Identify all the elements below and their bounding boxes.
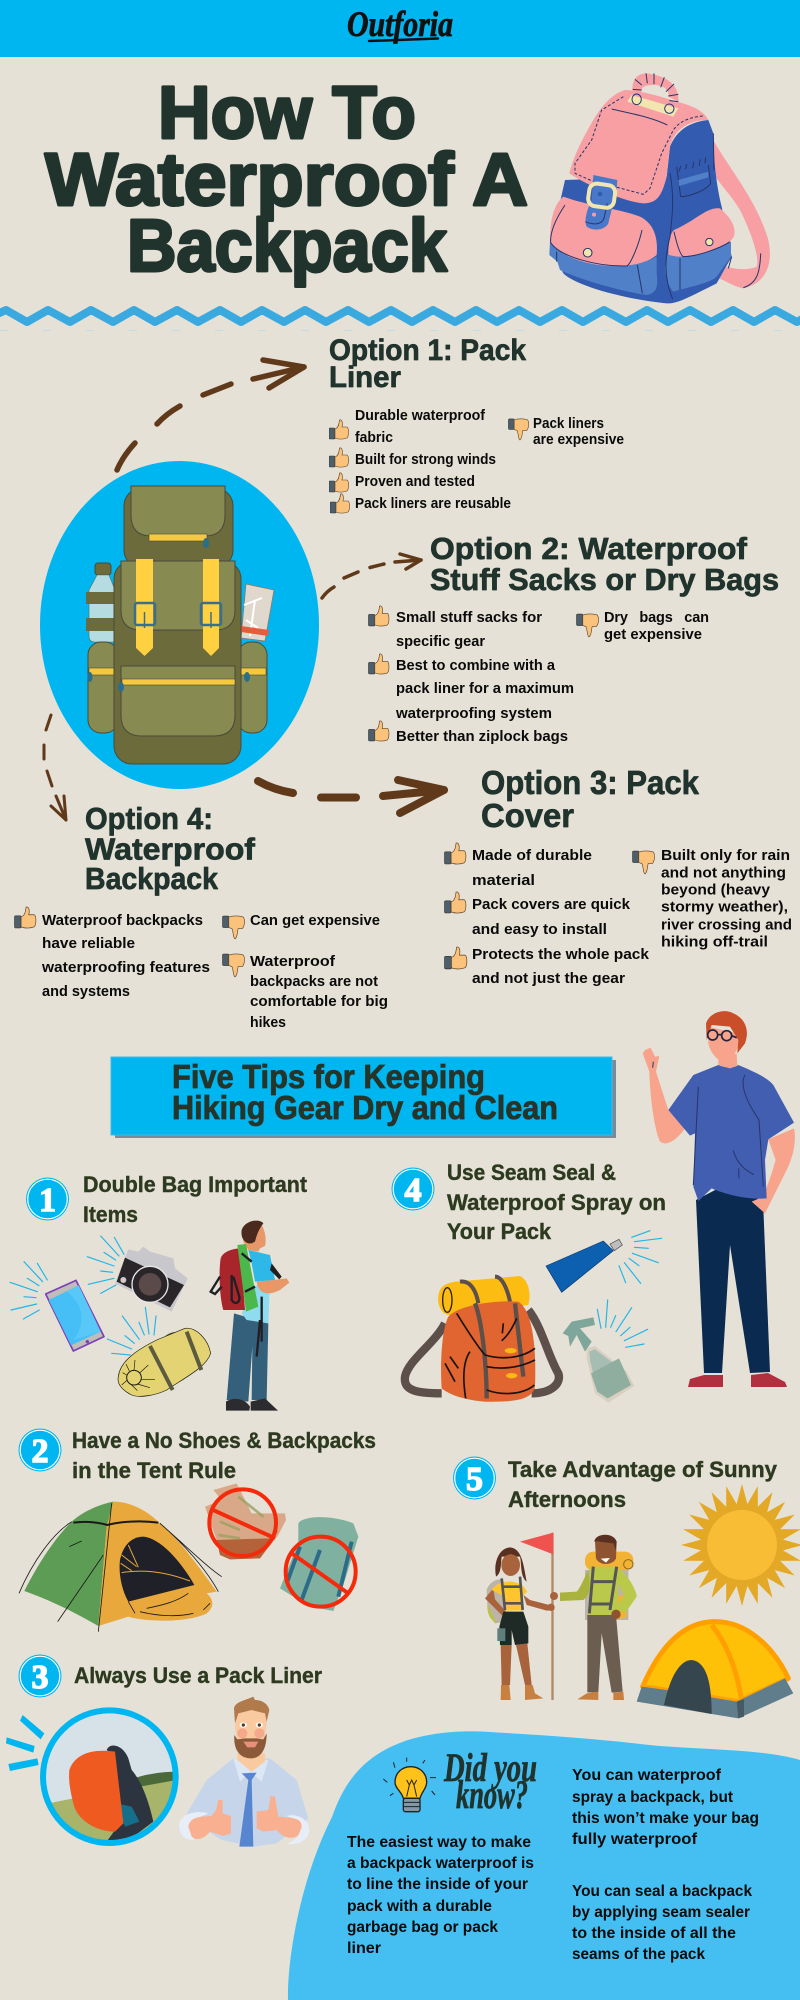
number badge 5: 5 — [466, 1461, 483, 1498]
heading: option 4: Waterproof — [85, 832, 256, 866]
icons: thumbs down — [223, 916, 245, 977]
top compartment — [124, 488, 233, 568]
number badge 2 — [18, 1428, 62, 1472]
panel: option 4 waterproof backpack — [15, 801, 388, 1031]
tip 4: seam seal and waterproof spray — [392, 1160, 666, 1403]
woman hiker — [485, 1547, 554, 1700]
cons list: beyond (heavy — [661, 882, 770, 898]
pros list — [41, 913, 210, 1000]
heading: option 2: Stuff Sacks or Dry Bags — [430, 562, 779, 597]
did you know title: know? — [456, 1772, 528, 1817]
rays — [10, 1236, 156, 1355]
icon: phone — [46, 1280, 104, 1351]
panel: option 2 stuff sacks or dry bags — [369, 531, 779, 745]
tip 1 heading: Double Bag Important — [83, 1172, 308, 1197]
cons list: Waterproof — [250, 954, 335, 970]
icon: sleeping bag — [118, 1328, 211, 1396]
pack, tube and spray illustration — [405, 1231, 662, 1403]
logo: Outforia: Outforia — [347, 4, 453, 44]
icon: thumbs down — [577, 614, 599, 637]
cons list: hikes — [250, 1015, 286, 1031]
number badge 3: 3 — [32, 1659, 48, 1696]
panel: option 1 pack liner — [329, 334, 624, 513]
pros list: material — [472, 873, 535, 889]
icons: thumbs up — [329, 420, 350, 513]
fact: easiest way: The easiest way to make — [347, 1834, 531, 1851]
pros list — [355, 408, 511, 512]
banner: five tips — [111, 1057, 616, 1138]
number badge 1: 1 — [39, 1182, 56, 1219]
icon: camera — [115, 1247, 188, 1312]
heading: option 2 — [430, 531, 779, 597]
cons list: river crossing and — [661, 918, 792, 934]
number badge 4 — [392, 1168, 434, 1210]
illustration: two hikers with flag — [485, 1533, 793, 1718]
tent, boot and backpack illustration — [19, 1483, 358, 1632]
man giving thumbs up — [179, 1697, 309, 1847]
tip 4 heading — [447, 1160, 666, 1244]
heading: option 4: Backpack — [85, 861, 219, 896]
tip 5 heading: Afternoons — [508, 1487, 626, 1512]
illustration: hiker from behind — [211, 1221, 289, 1411]
fact: seam sealer: to the inside of all the — [572, 1925, 736, 1942]
fact: easiest way: pack with a durable — [347, 1898, 492, 1915]
tip 3: always use a pack liner — [6, 1654, 322, 1847]
cons list: backpacks are not — [250, 974, 378, 990]
tip 2 heading — [72, 1428, 376, 1483]
pros list: Waterproof backpacks — [42, 913, 203, 929]
tip 5 heading — [508, 1457, 778, 1512]
pros list: Small stuff sacks for — [396, 610, 542, 626]
number badge 2: 2 — [32, 1433, 48, 1470]
number badge 5 — [453, 1456, 496, 1500]
pros list: Best to combine with a — [396, 658, 556, 674]
pros list: have reliable — [42, 936, 135, 952]
number badge 3 — [18, 1654, 62, 1698]
pros list: fabric — [355, 430, 393, 446]
arrow to option 2 — [322, 554, 421, 598]
number badge 4: 4 — [404, 1172, 422, 1209]
main body — [114, 561, 241, 764]
cons list: get expensive — [604, 627, 702, 643]
fact: waterproof spray: You can waterproof — [572, 1767, 722, 1784]
illustration: pink and blue backpack — [549, 73, 770, 303]
pros list: Pack liners are reusable — [355, 496, 511, 512]
man hiker — [547, 1535, 637, 1700]
wavy divider — [0, 310, 800, 330]
title: Backpack — [127, 204, 448, 287]
icon: light bulb — [383, 1758, 436, 1812]
tip 4 heading: Use Seam Seal & — [447, 1160, 616, 1185]
accent rays — [6, 1715, 44, 1771]
pros list: Protects the whole pack — [472, 947, 650, 963]
fact: waterproof spray: fully waterproof — [572, 1831, 698, 1848]
zipper pulls — [88, 538, 250, 692]
pros list — [395, 610, 574, 745]
fact: easiest way: to line the inside of your — [347, 1876, 528, 1893]
tip 1: double bag important items — [10, 1172, 308, 1411]
tip 1 heading — [83, 1172, 308, 1227]
pros list: Built for strong winds — [355, 452, 496, 468]
heading: option 1 — [329, 334, 526, 394]
icon: thumbs down — [633, 851, 655, 874]
cons list: are expensive — [533, 432, 624, 448]
banner heading: Five Tips for Keeping — [172, 1058, 485, 1095]
photo and man illustration — [6, 1697, 309, 1847]
did you know title — [443, 1745, 537, 1817]
arrow to option 3 — [258, 780, 444, 813]
tip 5 heading: Take Advantage of Sunny — [508, 1457, 778, 1482]
pros list: and easy to install — [472, 922, 607, 938]
heading: option 3: Option 3: Pack — [481, 764, 700, 801]
fact: waterproof spray: spray a backpack, but — [572, 1789, 734, 1806]
photo: hiker with orange pack cover — [40, 1707, 180, 1847]
fact: seam sealer — [572, 1883, 752, 1963]
fact: waterproof spray — [572, 1767, 759, 1848]
fact: easiest way: a backpack waterproof is — [347, 1855, 534, 1872]
heading: option 3 — [481, 764, 700, 834]
fact: waterproof spray: this won’t make your bag — [572, 1810, 759, 1827]
orange backpack with bedroll — [405, 1276, 559, 1402]
pros list: and not just the gear — [472, 971, 625, 987]
heading: option 4: Option 4: — [85, 801, 213, 836]
cons list — [604, 610, 709, 643]
icon: sealant tube — [546, 1239, 622, 1292]
cons list: Dry bags can — [604, 610, 709, 626]
tip 4 heading: Your Pack — [447, 1219, 552, 1244]
tip 4 heading: Waterproof Spray on — [447, 1190, 666, 1215]
icon: boot with no sign — [205, 1483, 286, 1559]
panel: option 3 pack cover — [445, 764, 792, 987]
items and hiker illustration — [10, 1221, 289, 1411]
heading: option 2: Option 2: Waterproof — [430, 531, 748, 566]
cons list: Pack liners — [533, 416, 604, 432]
fact: easiest way: garbage bag or pack — [347, 1919, 498, 1936]
pros list: and systems — [42, 984, 130, 1000]
did you know title: Did you — [443, 1745, 537, 1790]
flag — [520, 1533, 554, 1700]
rays — [597, 1231, 662, 1347]
cons list: Can get expensive — [250, 913, 380, 929]
title: How To — [158, 71, 416, 154]
pros list: waterproofing features — [41, 960, 210, 976]
illustration: blue oval with olive backpack — [40, 461, 319, 789]
cons list: and not anything — [661, 866, 786, 882]
arrow to option 1 — [117, 360, 304, 470]
did you know panel — [288, 1731, 800, 2000]
tip 1 heading: Items — [83, 1202, 138, 1227]
heading: option 3: Cover — [481, 797, 574, 834]
fact: seam sealer: by applying seam sealer — [572, 1904, 750, 1921]
icon: thumbs up — [15, 907, 36, 928]
icon: spray bottle — [563, 1317, 634, 1403]
tip 3 heading: Always Use a Pack Liner — [74, 1663, 322, 1688]
icon: thumbs down — [508, 419, 529, 440]
icons: thumbs up — [369, 606, 389, 741]
title — [45, 71, 528, 287]
water bottle — [86, 563, 116, 642]
header bar with logo — [0, 0, 800, 57]
side pockets — [88, 642, 118, 733]
pros list: Pack covers are quick — [472, 897, 631, 913]
pros list: specific gear — [396, 634, 485, 650]
cons list: stormy weather), — [661, 900, 788, 916]
heading: option 4 — [85, 801, 256, 896]
map — [241, 584, 274, 641]
pros list: pack liner for a maximum — [396, 681, 574, 697]
fact: easiest way: liner — [347, 1940, 381, 1957]
pros list: Made of durable — [472, 848, 592, 864]
fact: seam sealer: seams of the pack — [572, 1946, 705, 1963]
icon: sun — [681, 1484, 800, 1606]
fact: seam sealer: You can seal a backpack — [572, 1883, 752, 1900]
icon: backpack with no sign — [280, 1517, 358, 1611]
cons list — [661, 848, 792, 950]
pros list — [472, 848, 650, 987]
heading: option 1: Option 1: Pack — [329, 334, 526, 367]
tip 2: no shoes and backpacks in the tent — [18, 1428, 376, 1632]
tent — [19, 1502, 222, 1632]
pros list: Proven and tested — [355, 474, 475, 490]
cons list — [533, 416, 624, 448]
number badge 1 — [26, 1178, 69, 1220]
yellow tent — [637, 1622, 793, 1718]
cons list: hiking off-trail — [661, 934, 768, 950]
icons: thumbs up — [445, 843, 467, 969]
yellow straps and buckles — [135, 559, 221, 656]
pros list: Better than ziplock bags — [396, 729, 568, 745]
banner heading: Hiking Gear Dry and Clean — [172, 1089, 558, 1126]
pros list: waterproofing system — [395, 706, 552, 722]
fact: easiest way — [347, 1834, 534, 1957]
cons list: comfortable for big — [250, 994, 388, 1010]
cons list: Built only for rain — [661, 848, 790, 864]
pros list: Durable waterproof — [355, 408, 485, 424]
cons list — [250, 913, 388, 1031]
banner heading — [172, 1058, 558, 1126]
tip 2 heading: Have a No Shoes & Backpacks — [72, 1428, 376, 1453]
tip 2 heading: in the Tent Rule — [72, 1458, 236, 1483]
title: Waterproof A — [45, 138, 528, 221]
arrow to option 4 — [44, 715, 66, 820]
tip 5: sunny afternoons — [453, 1456, 800, 1718]
heading: option 1: Liner — [329, 361, 401, 394]
illustration: man in blue shirt waving — [643, 1011, 795, 1387]
